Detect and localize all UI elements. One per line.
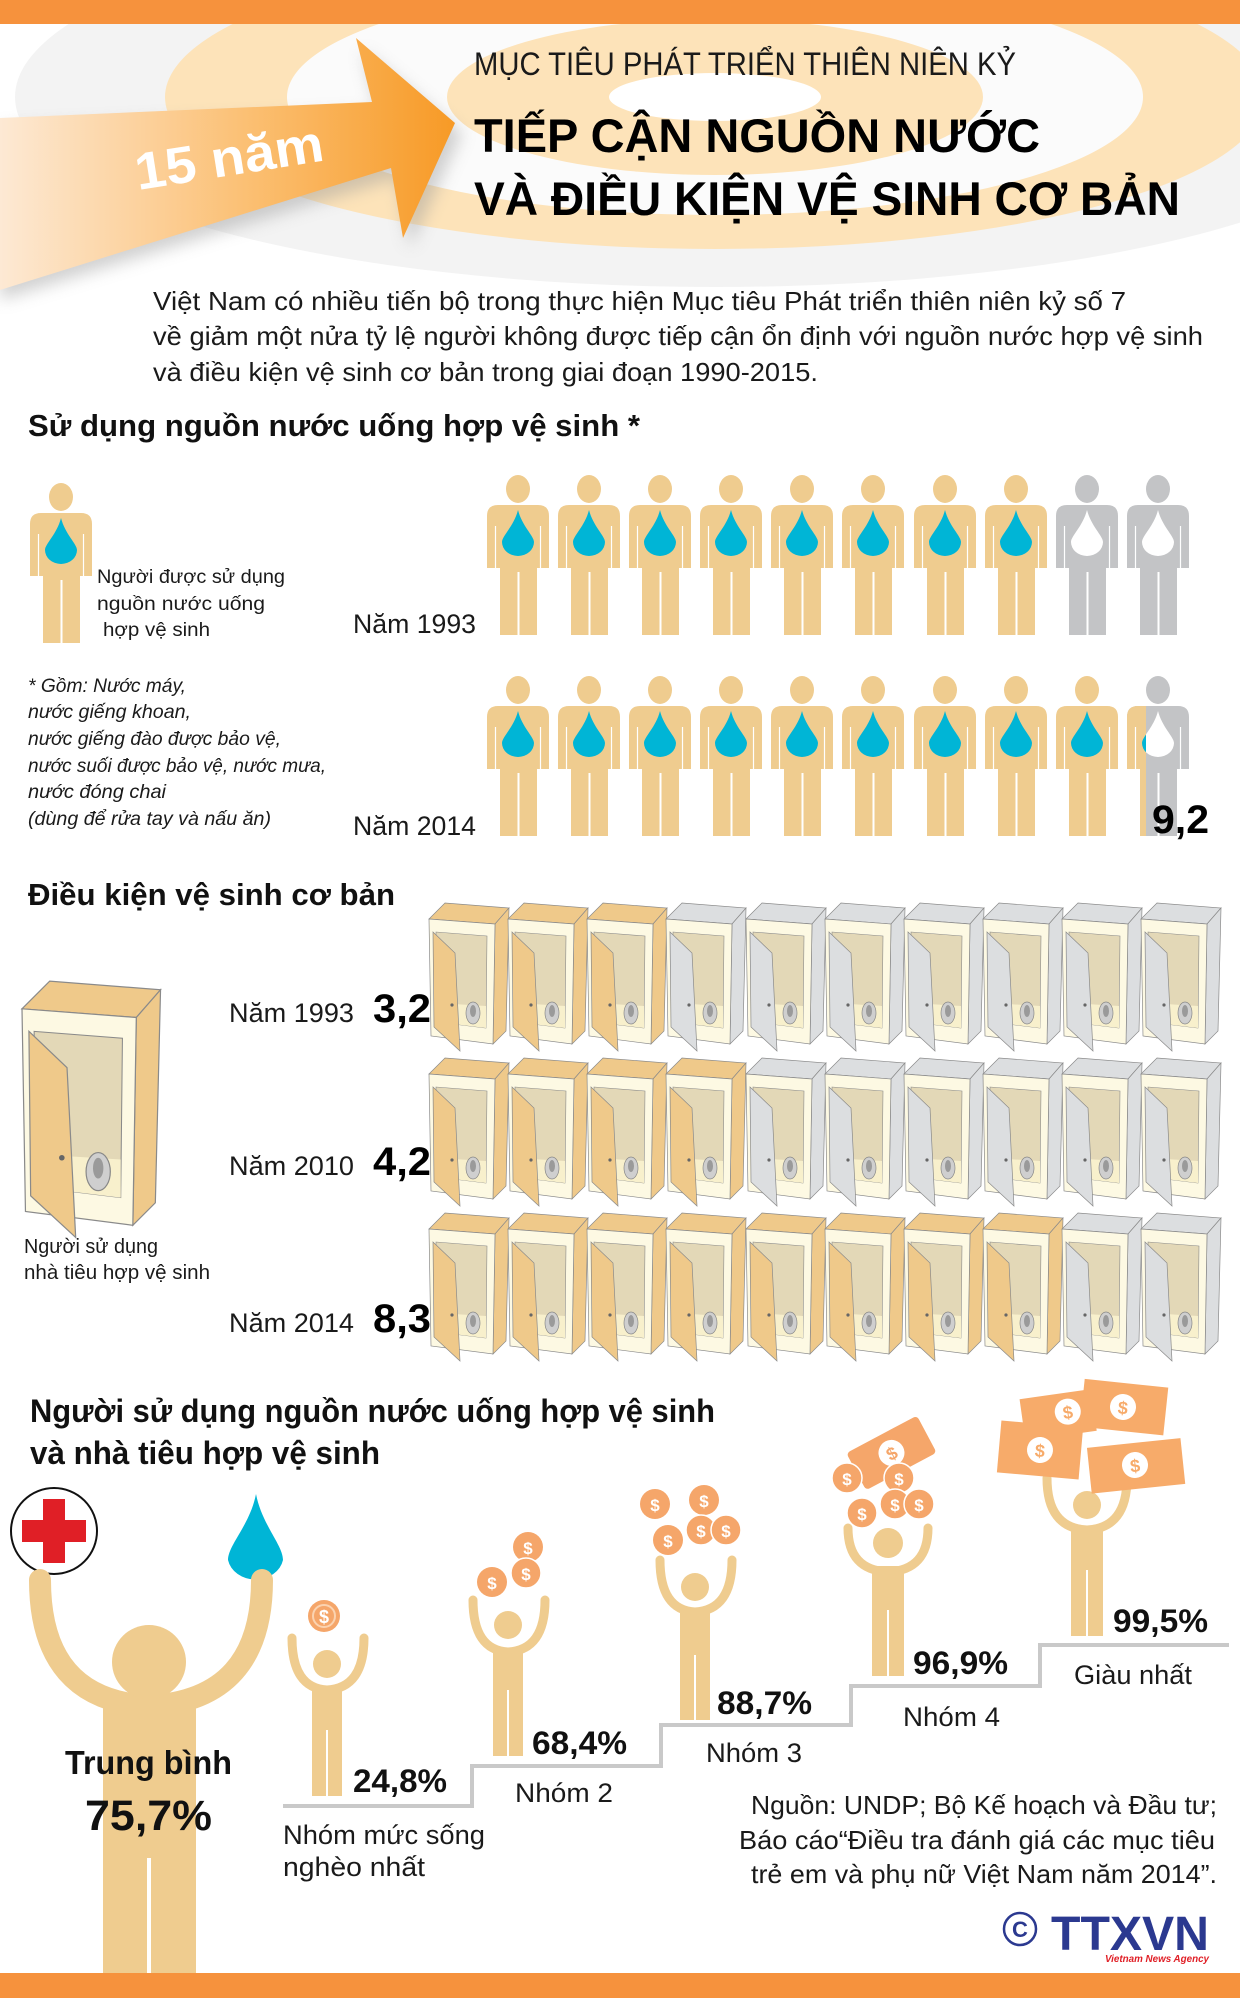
person: group 2: Nhóm 2 [515,1778,613,1808]
person: richest: $ [1034,1441,1046,1461]
intro paragraph: và điều kiện vệ sinh cơ bản trong giai đoạn 1990-2015. [153,357,818,387]
footnote: nước giếng khoan, [28,702,191,723]
row: water 2014 [353,676,1209,842]
person: richest: 99,5% [1113,1603,1208,1639]
icon: water drop [228,1494,283,1579]
row: water 1993: Năm 1993 [353,609,476,639]
person: group 4: 96,9% [913,1645,1008,1681]
person: group 3: Nhóm 3 [706,1738,802,1768]
source [739,1790,1217,1889]
logo: TTXVN: C [1012,1917,1028,1942]
heading: by wealth group: Người sử dụng nguồn nước uống hợp vệ sinh [30,1393,715,1429]
person: poorest group: $ [319,1607,329,1627]
row: toilets 2010: Năm 2010 [229,1151,354,1181]
person: group 2: 68,4% [532,1725,627,1761]
logo: TTXVN: TTXVN [1051,1908,1209,1961]
footnote [28,676,326,830]
person: group 3: $ [696,1522,706,1541]
header background rings [15,0,1240,287]
person: group 4: $ [883,1443,901,1465]
intro paragraph: về giảm một nửa tỷ lệ người không được tiếp cận ổn định với nguồn nước hợp vệ sinh [153,321,1203,351]
person: richest [997,1379,1208,1690]
big person: average: 75,7% [85,1792,212,1840]
icon: red cross [11,1488,97,1574]
person: richest: $ [1117,1398,1129,1418]
person: group 4: $ [914,1496,924,1515]
big person: average [40,1580,262,1977]
source: Báo cáo“Điều tra đánh giá các mục tiêu [739,1825,1215,1855]
person: richest: $ [1129,1456,1141,1476]
legend: toilet: nhà tiêu hợp vệ sinh [24,1262,210,1284]
person: poorest group: Nhóm mức sống [283,1820,485,1850]
legend: person with water: hợp vệ sinh [103,620,210,641]
person: group 3: 88,7% [717,1685,812,1721]
staircase [283,1645,1229,1806]
logo: TTXVN: Vietnam News Agency [1105,1954,1209,1965]
footnote: nước đóng chai [28,782,167,803]
source: Nguồn: UNDP; Bộ Kế hoạch và Đầu tư; [751,1790,1217,1820]
person: group 4: $ [890,1496,900,1515]
footnote: * Gồm: Nước máy, [28,676,186,697]
row: toilets 2014: Năm 2014 [229,1308,354,1338]
row: toilets 1993: Năm 1993 [229,998,354,1028]
row: water 1993 [353,475,1189,639]
row: toilets 2014 [229,1213,1221,1361]
person: group 4 [832,1416,1008,1732]
footnote: (dùng để rửa tay và nấu ăn) [28,809,271,830]
footnote: nước giếng đào được bảo vệ, [28,729,281,750]
row: toilets 2010 [229,1058,1221,1206]
title block: TIẾP CẬN NGUỒN NƯỚC [474,109,1040,162]
person: group 3: $ [699,1492,709,1511]
bottom bar [0,1973,1240,1998]
person: group 2: $ [487,1574,497,1593]
legend: person with water [30,483,285,643]
person: poorest group [283,1600,485,1882]
big person: average: Trung bình [65,1744,232,1781]
person: group 3: $ [650,1496,660,1515]
heading: by wealth group [30,1393,715,1471]
arrow: 15 năm: 15 năm [131,115,328,202]
person: group 4: $ [857,1505,867,1524]
person: richest: Giàu nhất [1074,1660,1192,1690]
legend: toilet: Người sử dụng [24,1236,158,1258]
row: toilets 1993: 3,2 [373,987,431,1031]
heading: by wealth group: và nhà tiêu hợp vệ sinh [30,1435,380,1471]
row: water 2014: 9,2 [1152,798,1209,842]
legend: person with water: nguồn nước uống [97,594,265,615]
person: group 4: $ [842,1470,852,1489]
top bar [0,0,1240,24]
person: group 4: Nhóm 4 [903,1702,1000,1732]
arrow: 15 năm [0,38,462,300]
legend: toilet [22,981,210,1284]
person: group 2: $ [523,1539,533,1558]
person: group 4: $ [894,1470,904,1489]
heading: sanitation: Điều kiện vệ sinh cơ bản [28,877,395,912]
title block: MỤC TIÊU PHÁT TRIỂN THIÊN NIÊN KỶ [474,46,1016,82]
row: toilets 2010: 4,2 [373,1140,431,1184]
person: group 3 [640,1485,812,1768]
legend: person with water: Người được sử dụng [97,567,285,588]
row: water 2014: Năm 2014 [353,811,476,841]
title block: VÀ ĐIỀU KIỆN VỆ SINH CƠ BẢN [474,172,1180,225]
person: group 2 [473,1532,627,1808]
person: richest: $ [1062,1402,1074,1423]
intro paragraph: Việt Nam có nhiều tiến bộ trong thực hiện Mục tiêu Phát triển thiên niên kỷ số 7 [153,286,1126,316]
intro paragraph [153,286,1203,387]
footnote: nước suối được bảo vệ, nước mưa, [28,756,326,777]
source: trẻ em và phụ nữ Việt Nam năm 2014”. [751,1859,1217,1889]
title block [474,46,1180,225]
person: group 3: $ [721,1522,731,1541]
row: toilets 2014: 8,3 [373,1297,431,1341]
person: group 3: $ [663,1532,673,1551]
heading: water: Sử dụng nguồn nước uống hợp vệ sinh * [28,408,641,443]
row: toilets 1993 [229,903,1221,1051]
person: poorest group: nghèo nhất [283,1852,426,1882]
person: poorest group: 24,8% [353,1763,447,1799]
person: group 2: $ [521,1565,531,1584]
